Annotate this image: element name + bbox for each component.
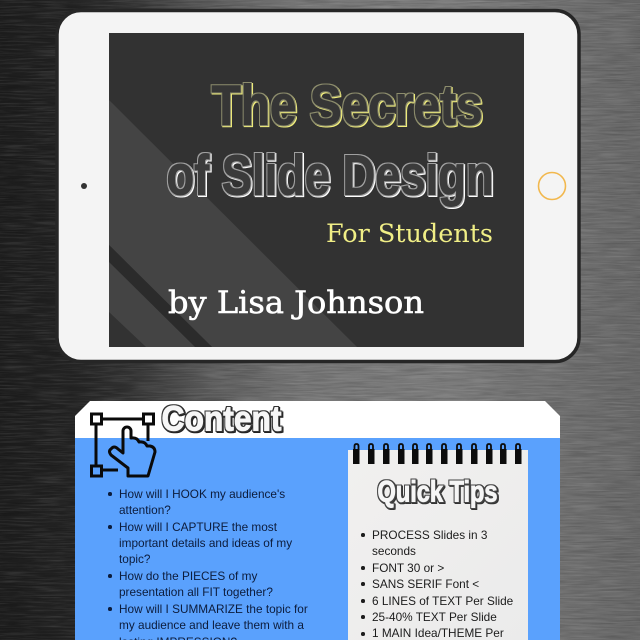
list: content questions: attention? — [119, 503, 171, 517]
title line 2: of Slide Design — [166, 144, 494, 208]
author: by Lisa Johnson — [168, 285, 424, 321]
list: quick tips: 6 LINES of TEXT Per Slide — [372, 594, 513, 608]
title line 1: The Secrets — [212, 74, 482, 138]
list: content questions: my audience and leave them with a — [119, 618, 304, 632]
tablet device — [55, 8, 581, 364]
list: quick tips: PROCESS Slides in 3 — [372, 528, 487, 542]
list: content questions: important details and ideas of my — [119, 536, 292, 550]
list: content questions: How will I SUMMARIZE the topic for — [119, 602, 308, 616]
heading: Content: Content — [162, 398, 282, 438]
list: content questions — [108, 487, 308, 640]
list: content questions: How do the PIECES of my — [119, 569, 257, 583]
list: content questions: How will I CAPTURE the most — [119, 520, 277, 534]
list: content questions: presentation all FIT together? — [119, 585, 273, 599]
list: quick tips: seconds — [372, 544, 416, 558]
list: content questions: topic? — [119, 552, 150, 566]
list: quick tips: FONT 30 or > — [372, 561, 444, 575]
icon: hand selecting frame — [90, 412, 156, 478]
list: quick tips: 1 MAIN Idea/THEME Per — [372, 626, 504, 640]
tablet screen — [109, 33, 524, 347]
list: quick tips — [361, 528, 513, 640]
list: content questions: How will I HOOK my audience's — [119, 487, 285, 501]
panel: quick tips notepad — [348, 450, 528, 640]
panel: content sheet — [75, 401, 560, 640]
icon: notepad spiral rings — [353, 443, 522, 464]
list: quick tips: SANS SERIF Font < — [372, 577, 479, 591]
list: quick tips: 25-40% TEXT Per Slide — [372, 610, 497, 624]
blue body — [75, 438, 560, 640]
white header band — [75, 401, 560, 438]
tablet body — [57, 10, 579, 362]
subtitle: For Students — [326, 219, 493, 248]
camera dot — [81, 183, 87, 189]
home button — [538, 172, 566, 200]
